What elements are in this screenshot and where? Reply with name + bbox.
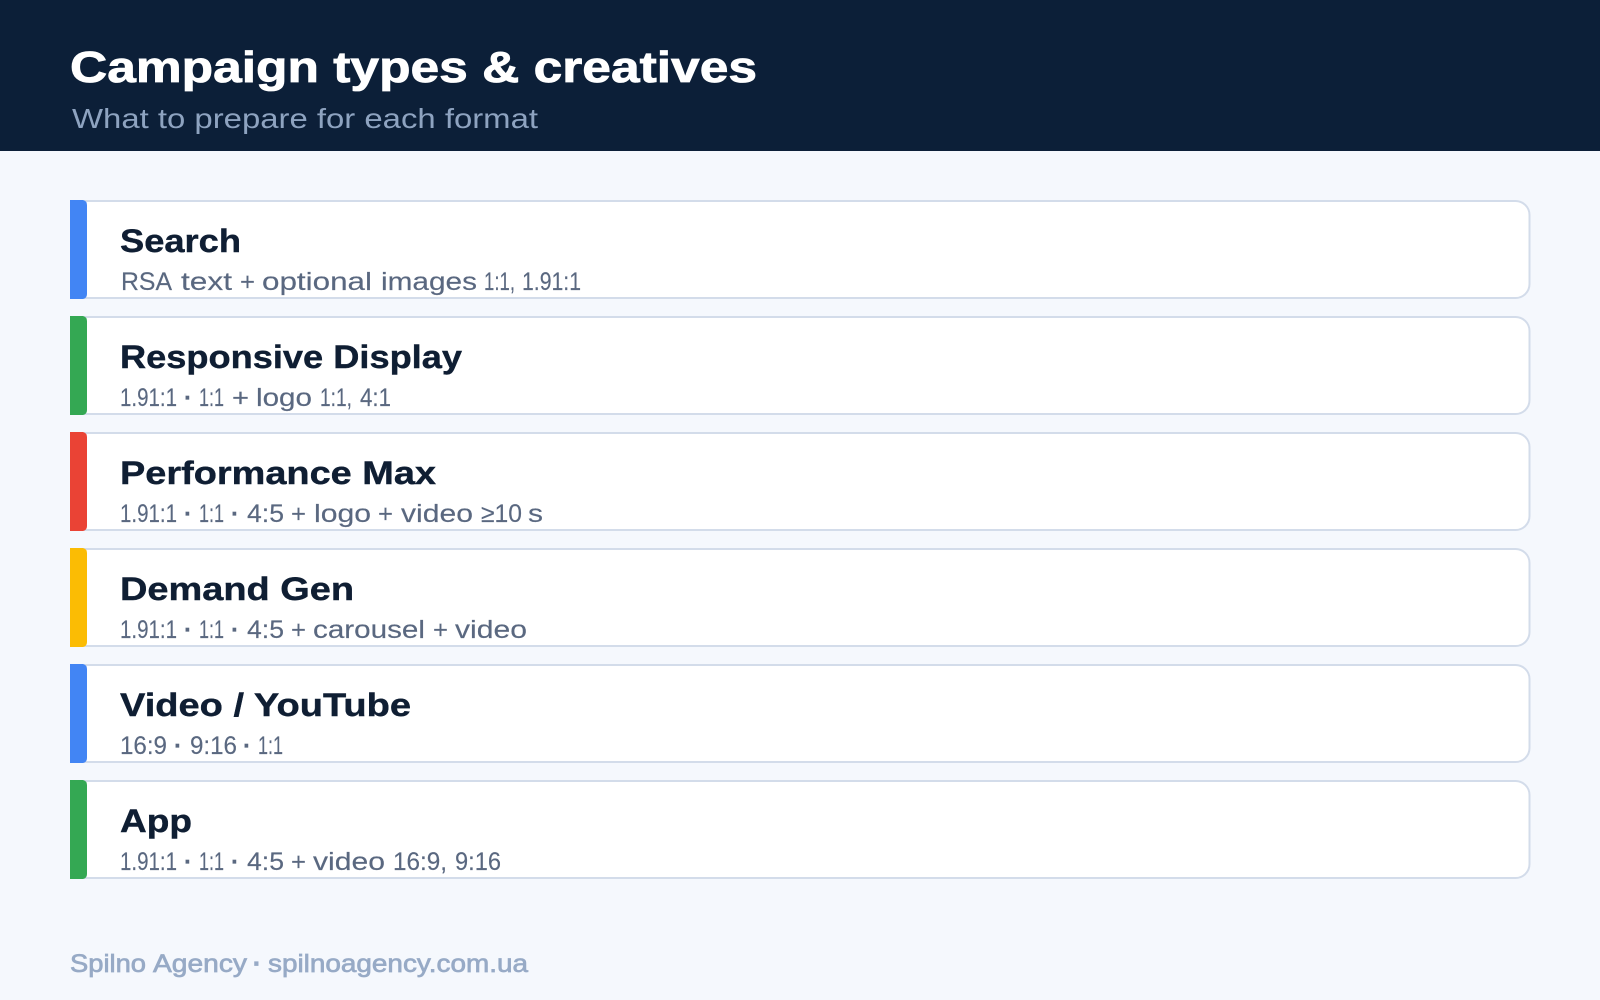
detail line: logo (256, 384, 312, 412)
detail line: 1:1, (484, 268, 515, 296)
footer: · (253, 950, 261, 978)
detail line: · (184, 500, 192, 528)
detail line: 1.91:1 (522, 268, 581, 296)
detail line: · (174, 732, 182, 760)
detail line: · (184, 384, 192, 412)
detail line: carousel (313, 616, 425, 644)
detail line: · (184, 616, 192, 644)
detail line: + (291, 616, 306, 644)
card: Demand Gen (70, 548, 1530, 647)
card: Performance Max (70, 432, 1530, 531)
footer: Agency (153, 950, 248, 978)
detail line: 4:5 (247, 848, 284, 876)
card: Demand Gen: Demand Gen (120, 571, 354, 607)
detail line: RSA (121, 268, 172, 296)
footer (70, 950, 528, 978)
detail line (120, 848, 501, 876)
detail line: s (528, 500, 543, 528)
detail line (120, 384, 391, 412)
detail line: video (455, 616, 527, 644)
detail line: 4:5 (247, 616, 284, 644)
detail line: + (240, 268, 255, 296)
title: Campaign types & creatives (70, 43, 757, 92)
card: Search (70, 200, 1530, 299)
detail line: logo (314, 500, 371, 528)
detail line: 1:1 (258, 732, 283, 760)
detail line: 9:16 (455, 848, 501, 876)
card: Search: Search (120, 223, 241, 259)
detail line: 1.91:1 (120, 848, 177, 876)
detail line (120, 616, 527, 644)
detail line: images (381, 268, 477, 296)
detail line: · (231, 848, 239, 876)
detail line: 1:1 (199, 848, 224, 876)
detail line: 9:16 (190, 732, 237, 760)
detail line: + (378, 500, 393, 528)
card: App: App (120, 803, 192, 839)
detail line: 1:1, (320, 384, 352, 412)
detail line: 4:1 (360, 384, 391, 412)
detail line (120, 732, 283, 760)
detail line: · (184, 848, 192, 876)
footer: Spilno (70, 950, 146, 978)
detail line: + (232, 384, 249, 412)
card: Performance Max: Performance Max (120, 455, 436, 491)
subtitle: What to prepare for each format (72, 103, 538, 134)
header band (0, 0, 1600, 151)
card: Responsive Display (70, 316, 1530, 415)
detail line: + (433, 616, 448, 644)
detail line: 1.91:1 (120, 384, 177, 412)
detail line: + (291, 500, 306, 528)
card: Video / YouTube: Video / YouTube (120, 687, 411, 723)
detail line (120, 500, 543, 528)
detail line: text (181, 268, 232, 296)
detail line: video (401, 500, 473, 528)
detail line: video (313, 848, 385, 876)
card: Video / YouTube (70, 664, 1530, 763)
card: App (70, 780, 1530, 879)
detail line: 16:9, (393, 848, 447, 876)
detail line: 1:1 (199, 500, 224, 528)
detail line: 4:5 (247, 500, 284, 528)
detail line: · (231, 616, 239, 644)
detail line: 1.91:1 (120, 616, 177, 644)
detail line: ≥10 (481, 500, 522, 528)
detail line: · (243, 732, 251, 760)
card: Responsive Display: Responsive Display (120, 339, 462, 375)
detail line: 1.91:1 (120, 500, 177, 528)
detail line: optional (262, 268, 372, 296)
footer: spilnoagency.com.ua (268, 950, 528, 978)
detail line: 16:9 (120, 732, 167, 760)
detail line: + (291, 848, 306, 876)
detail line (121, 268, 581, 296)
detail line: 1:1 (199, 616, 224, 644)
detail line: 1:1 (199, 384, 224, 412)
detail line: · (231, 500, 239, 528)
